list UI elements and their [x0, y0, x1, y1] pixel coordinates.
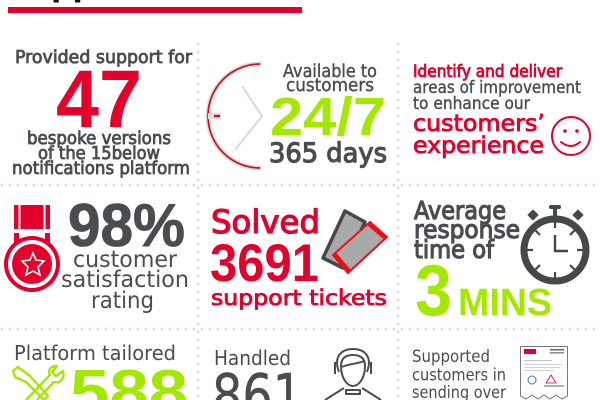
text: customer satisfaction rating	[61, 247, 189, 314]
icon: clock	[208, 64, 262, 168]
text: average response time of: response	[414, 215, 520, 244]
text: platform tailored: Platform tailored	[14, 341, 176, 365]
panel: 47 bespoke versions	[12, 47, 193, 179]
number: 24/7: 24/7	[270, 87, 386, 147]
text: areas of improvement: areas of improvement	[413, 78, 581, 97]
text: supported customers in sending over	[412, 347, 506, 400]
text: areas of improvement: to enhance our	[413, 94, 530, 113]
number: 98%: 98%	[68, 192, 185, 259]
text: bespoke versions: bespoke versions	[27, 129, 171, 149]
text: bespoke versions: notifications platform	[12, 159, 190, 179]
text: bespoke versions	[12, 129, 190, 179]
panel: notifications sent	[412, 346, 568, 400]
text: available to customers: customers	[286, 75, 374, 96]
panel: customer experience	[413, 62, 590, 159]
icon: tools	[13, 366, 63, 400]
text: support tickets: support tickets	[211, 286, 387, 311]
text: supported customers in sending over: Supported	[412, 347, 490, 366]
text: customer satisfaction rating: customer	[73, 247, 178, 273]
panel: 588 platform tailored	[13, 341, 188, 400]
text: average response time of: time of	[414, 235, 495, 264]
icon: medal	[4, 205, 60, 292]
text: provided support for: Provided support for	[15, 47, 193, 68]
text: customers' experience: customers’	[413, 111, 545, 137]
heading underline	[8, 7, 302, 13]
text: solved: Solved	[211, 203, 320, 241]
text: customer satisfaction rating: rating	[91, 288, 154, 314]
text: customers' experience	[413, 111, 545, 159]
panel: 3691 tickets	[210, 203, 387, 311]
text: 365 days: 365 days	[269, 138, 387, 169]
text: average response time of: Average	[414, 196, 506, 225]
icon: support agent	[325, 349, 381, 400]
icon: notification document	[520, 346, 568, 399]
icon: smiley	[552, 117, 590, 155]
text: areas of improvement	[413, 78, 581, 113]
text: average response time of	[414, 196, 520, 264]
text: customers' experience: experience	[413, 133, 544, 159]
panel: 98% satisfaction	[4, 192, 189, 314]
text: customer satisfaction rating: satisfaction	[61, 267, 189, 293]
panel: 861 handled	[212, 346, 381, 400]
text: identify and deliver: Identify and deliver	[413, 62, 562, 81]
text: mins: MINS	[458, 282, 552, 324]
icon: tickets	[323, 211, 387, 273]
text: available to customers: Available to	[283, 61, 377, 82]
text: supported customers in sending over: customers in	[412, 366, 506, 384]
text: bespoke versions: of the 15below	[38, 144, 160, 164]
number: 3691: 3691	[210, 234, 319, 293]
panel: 3 min response	[414, 196, 586, 331]
text: handled: Handled	[214, 346, 291, 370]
icon: stopwatch	[524, 205, 586, 281]
text: available to customers	[283, 61, 377, 96]
number: 3: 3	[415, 251, 452, 331]
number: 47: 47	[56, 54, 142, 145]
panel: 24/7 availability	[208, 61, 387, 169]
